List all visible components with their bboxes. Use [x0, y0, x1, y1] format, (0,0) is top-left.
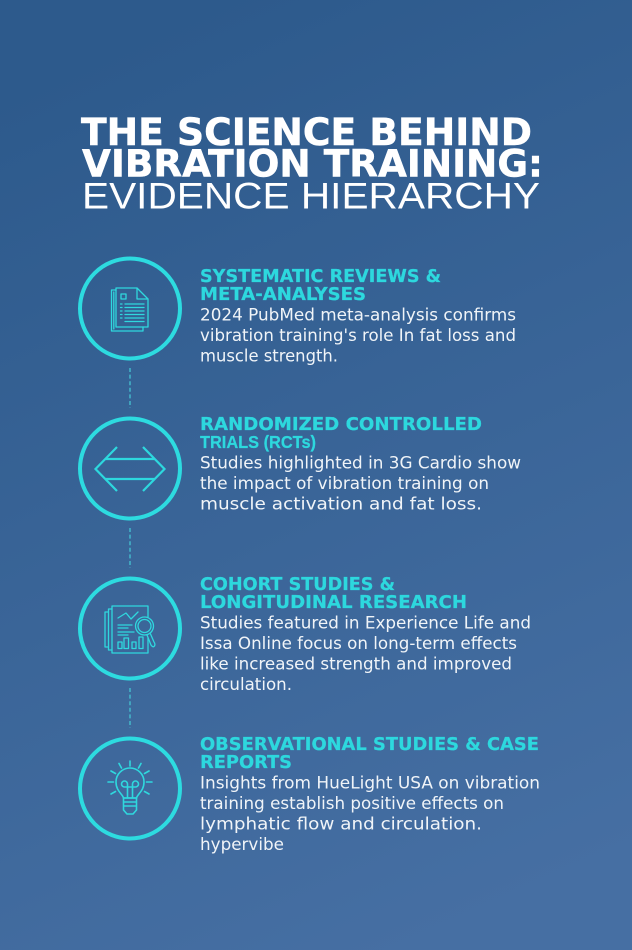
body text: muscle activation and fat loss.	[200, 494, 482, 514]
heading: TRIALS (RCTs)	[200, 432, 316, 452]
body text: hypervibe	[200, 835, 284, 854]
connector: cohort to observational	[129, 688, 131, 728]
panel: randomized controlled trials	[80, 414, 521, 518]
body text: the impact of vibration training on	[200, 474, 489, 493]
title: THE SCIENCE BEHIND	[81, 111, 532, 154]
heading: OBSERVATIONAL STUDIES & CASE	[200, 734, 539, 755]
heading: RANDOMIZED CONTROLLED	[200, 414, 482, 435]
icon: report with magnifier in circle	[80, 578, 180, 678]
body text: training establish positive effects on	[200, 794, 504, 813]
body text: lymphatic flow and circulation.	[200, 814, 482, 834]
body text	[200, 774, 540, 854]
icon: light bulb in circle	[80, 738, 180, 838]
heading: SYSTEMATIC REVIEWS &	[200, 266, 441, 287]
body text	[200, 614, 531, 694]
body text: Studies featured in Experience Life and	[200, 614, 531, 632]
body text: Studies highlighted in 3G Cardio show	[200, 454, 521, 472]
title: VIBRATION TRAINING:	[82, 142, 543, 186]
body text: muscle strength.	[200, 346, 338, 366]
heading: COHORT STUDIES &	[200, 574, 395, 595]
icon: documents in circle	[80, 258, 180, 358]
panel: cohort studies	[80, 574, 531, 694]
heading: LONGITUDINAL RESEARCH	[200, 592, 467, 613]
body text: Issa Online focus on long-term effects	[200, 634, 517, 653]
panel: systematic reviews	[80, 258, 516, 366]
heading: REPORTS	[200, 752, 292, 773]
heading	[200, 266, 441, 305]
body text: 2024 PubMed meta-analysis confirms	[200, 306, 516, 324]
connector: reviews to trials	[129, 368, 131, 408]
body text: like increased strength and improved	[200, 654, 512, 674]
body text	[200, 306, 516, 366]
connector: trials to cohort	[129, 528, 131, 568]
body text: circulation.	[200, 675, 292, 694]
body text: vibration training's role In fat loss and	[200, 326, 516, 345]
panel: observational studies	[80, 734, 540, 854]
heading	[200, 574, 467, 613]
icon: double arrow in circle	[80, 418, 180, 518]
heading: META-ANALYSES	[200, 284, 366, 305]
body text	[200, 454, 521, 514]
heading	[200, 734, 539, 773]
title	[81, 111, 543, 216]
body text: Insights from HueLight USA on vibration	[200, 774, 540, 792]
heading	[200, 414, 482, 452]
title: EVIDENCE HIERARCHY	[82, 176, 540, 216]
